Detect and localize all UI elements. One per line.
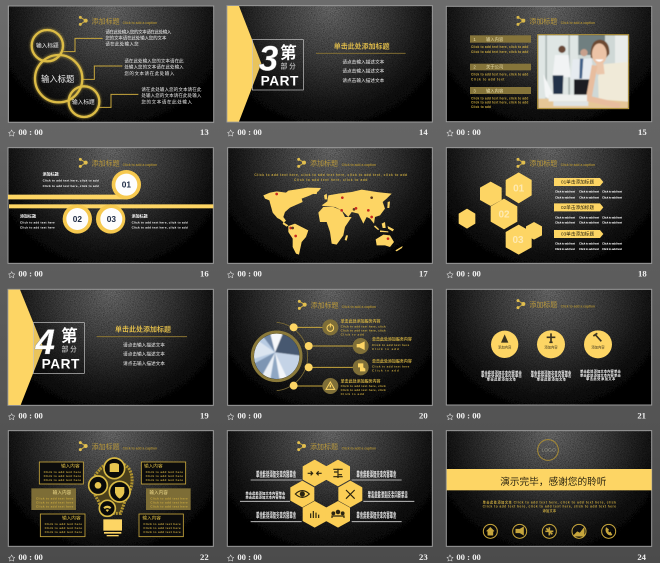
circle: plane: 添加内容 — [544, 345, 558, 350]
footer — [228, 127, 428, 137]
callout: bottom left: 输入内容 — [62, 515, 81, 522]
text block 02: Click to add text here — [20, 226, 55, 230]
heading: 添加标题 — [92, 442, 120, 451]
slide 22: light bulb — [8, 431, 213, 562]
callout: middle left: Click to add text here — [36, 496, 74, 500]
hexagon numbers: 01 — [513, 183, 525, 194]
side captions: 单击此处添加文本内容单击 — [256, 514, 297, 519]
caption 1: 单击此处添加文本内容单击 — [481, 369, 522, 374]
description lines: 请点击输入描述文本 — [123, 351, 165, 358]
icon: megaphone — [353, 338, 369, 354]
label 01: 01单击添加标题 — [561, 179, 594, 186]
service text 2 — [372, 336, 412, 351]
small text rows: Click to add text — [555, 221, 575, 225]
heading: Click to add a caption — [342, 163, 376, 167]
footer: 20 — [419, 411, 428, 421]
list item 1: Click to add text here, click to add — [471, 45, 528, 49]
text block 03 — [132, 212, 188, 230]
section title: 单击此处添加标题 — [115, 325, 171, 334]
heading: Click to add a caption — [123, 163, 157, 167]
service text 4: Click to add — [341, 392, 364, 396]
list item 3: Click to add — [471, 105, 491, 109]
list item 1: Click to add text here, click to add — [471, 50, 528, 54]
yellow wedge — [227, 6, 261, 122]
service text 1 — [341, 317, 386, 337]
footer — [9, 127, 209, 137]
side captions: 单击此处添加文本内容单击 — [256, 510, 297, 515]
callout: bottom left: Click to add text here — [45, 530, 82, 534]
heading — [516, 158, 595, 168]
list item 2: 关于公司 — [486, 64, 503, 71]
caption 2: 单击此处添加文本内容单击 — [531, 369, 572, 374]
footer: 00 : 00 — [456, 552, 481, 562]
small text rows — [555, 190, 622, 251]
footer: 00 : 00 — [237, 269, 262, 279]
callout: top left: Click to add text here — [44, 470, 81, 474]
service text 3: Click to add text here — [372, 365, 410, 369]
slide 24: closing — [446, 431, 652, 562]
map caption: Click to add text here, click to add text here, click to add text, click to add — [254, 173, 407, 177]
yellow bars — [8, 195, 213, 208]
footer: 21 — [637, 411, 646, 421]
text block 03: Click to add text here, click to add — [132, 220, 188, 224]
small text rows: Click to add text — [555, 215, 575, 219]
footer: 00 : 00 — [237, 127, 262, 137]
text block 02: Click to add text here — [20, 220, 55, 224]
hexagon cluster — [459, 172, 542, 255]
side captions: 单击此处添加文本内容单击 — [245, 494, 286, 499]
light bulb — [89, 458, 132, 536]
label 02 — [554, 203, 603, 211]
icon: power — [322, 319, 338, 335]
service text 3: Click to add — [372, 369, 399, 373]
heading — [297, 158, 376, 168]
heading: 添加标题 — [92, 17, 120, 26]
icon: warning — [322, 378, 338, 394]
footer: 00 : 00 — [18, 411, 43, 421]
footer: 00 : 00 — [237, 411, 262, 421]
part badge: 部 分 — [281, 61, 296, 70]
marker 01 — [112, 170, 141, 199]
circle labels: 输入标题 — [36, 42, 59, 50]
caption 2 — [531, 369, 572, 382]
small text rows: Click to add text — [579, 195, 599, 199]
small text rows: Click to add text — [579, 221, 599, 225]
footer — [228, 411, 428, 421]
callout: middle right: 输入内容 — [149, 489, 168, 496]
caption 2: 单击此处添加文本 — [537, 377, 567, 382]
label 02: 02单击添加标题 — [561, 204, 594, 211]
closing banner — [447, 469, 652, 490]
text blocks: 您的文本请在此处输入 — [124, 70, 175, 77]
text blocks: 请在此处输入您 — [105, 41, 139, 48]
callout: bottom right: Click to add text here — [143, 522, 181, 526]
callout: top right: Click to add text here — [146, 470, 183, 474]
hexagon numbers: 03 — [512, 235, 524, 246]
footer — [447, 411, 646, 421]
callout: bottom right: Click to add text here — [143, 530, 181, 534]
photo of skyscrapers — [253, 332, 300, 381]
circle labels: 输入标题 — [41, 74, 75, 84]
description lines: 请点击输入描述文本 — [342, 68, 385, 75]
service text 1: Click to add — [341, 333, 364, 337]
footer — [447, 127, 647, 137]
marker 01: 01 — [122, 180, 131, 190]
callout: top left: Click to add text here — [44, 478, 81, 482]
callout: top left: Click to add text here — [44, 474, 81, 478]
text block 01: Click to add text here, click to add — [43, 179, 99, 183]
caption 3: 单击此处添加文本内容单击 — [580, 372, 621, 377]
part badge: PART — [261, 73, 299, 88]
list item 2: 2 — [473, 65, 476, 70]
logo badge: LOGO — [541, 448, 556, 454]
side captions: 单击此处添加文本内容单击 — [256, 469, 297, 474]
hexagon icons — [295, 469, 355, 518]
part badge: 第 — [61, 326, 78, 346]
footer: 24 — [637, 552, 647, 562]
icon: hand — [353, 359, 369, 375]
slide 21: three circle icons — [446, 289, 652, 421]
callout: bottom right: Click to add text here — [143, 526, 181, 530]
service text 2: 单击此处添加服务内容 — [372, 336, 412, 342]
footer: 00 : 00 — [18, 269, 43, 279]
part badge — [252, 40, 303, 90]
small text rows: Click to add text — [602, 195, 622, 199]
closing description: 单击此处添加文本 Click to add text here, click to add text here, click — [483, 499, 616, 504]
small text rows: Click to add text — [602, 242, 622, 246]
part badge: 3 — [259, 40, 279, 79]
footer: 15 — [638, 127, 647, 137]
callout: bottom right: 输入内容 — [142, 515, 161, 522]
text blocks: 请在此处输入您的文本请在此处输入 — [105, 29, 172, 36]
part badge: PART — [42, 357, 80, 372]
yellow wedge — [8, 290, 43, 405]
small text rows: Click to add text — [555, 190, 575, 194]
list item 1: 输入内容 — [486, 36, 504, 43]
text block 01: 添加标题 — [43, 171, 59, 177]
small text rows: Click to add text — [579, 215, 599, 219]
side captions: 单击此处添加文本内容单击 — [368, 494, 408, 499]
callout: top right — [141, 462, 186, 484]
slide 18: hexagon list — [446, 148, 652, 279]
heading: Click to add a caption — [123, 446, 157, 450]
list item 2: Click to add text — [471, 77, 505, 81]
text blocks: 处输入您的文本请在此处输入 — [141, 92, 202, 99]
service text 3: 单击此处添加服务内容 — [372, 357, 412, 363]
callout: middle left: 输入内容 — [53, 489, 72, 496]
heading — [516, 16, 595, 26]
divider — [316, 52, 406, 55]
list item 3: 3 — [473, 88, 476, 93]
part badge: 部 分 — [62, 345, 77, 354]
connector lines — [294, 327, 353, 386]
footer — [228, 552, 428, 562]
service text 2: Click to add text here — [372, 343, 410, 347]
circle: tent: 添加内容 — [498, 345, 512, 350]
closing description: Click to add text here, click to add text here, click to add text here — [483, 505, 616, 509]
list item 2 — [470, 64, 531, 81]
slide 23: hexagon ring — [227, 431, 432, 562]
callout: top right: 输入内容 — [144, 463, 163, 470]
service text 4: Click to add text here, click — [341, 388, 386, 392]
list item 1 — [470, 35, 531, 54]
service text 1: 单击此处添加服务内容 — [341, 317, 381, 323]
text blocks: 请在此处输入您的文本请在此 — [124, 58, 184, 65]
text blocks: 请在此处输入您的文本请在此 — [141, 86, 202, 93]
heading: 添加标题 — [310, 442, 338, 451]
side captions — [245, 469, 408, 519]
list item 3: 输入内容 — [486, 87, 504, 94]
callout: bottom left — [40, 514, 85, 537]
service text 4: Click to add text here, click — [341, 384, 386, 388]
label 03 — [554, 230, 603, 238]
footer — [447, 552, 647, 562]
slide 15: list with photo — [446, 6, 652, 137]
heading — [79, 16, 157, 26]
circle: tools: 添加内容 — [591, 345, 605, 350]
caption 1: 单击此处添加文本 — [487, 377, 517, 382]
footer: 18 — [638, 269, 647, 279]
circle: tools — [584, 330, 612, 358]
list item 3: Click to add text here, click to add — [471, 96, 528, 100]
text block 02: 添加标题 — [20, 212, 36, 218]
marker 02: 02 — [73, 214, 82, 224]
arc — [277, 322, 308, 391]
footer: 14 — [419, 127, 428, 137]
callout: bottom right — [139, 514, 183, 537]
description lines — [123, 342, 165, 367]
callout: top right: Click to add text here — [146, 474, 183, 478]
part badge — [33, 323, 84, 373]
section title: 单击此处添加标题 — [334, 42, 390, 51]
slide 19: part 4 divider — [8, 289, 213, 421]
small text rows: Click to add text — [602, 221, 622, 225]
footer: 00 : 00 — [237, 552, 262, 562]
divider — [97, 335, 187, 338]
small text rows: Click to add text — [579, 242, 599, 246]
list item 3 — [470, 87, 531, 109]
side captions: 单击此处添加文本内容单击 — [356, 469, 397, 474]
photo ring — [252, 332, 301, 381]
callout: middle left — [31, 488, 76, 510]
footer — [9, 411, 209, 421]
footer: 00 : 00 — [456, 127, 481, 137]
heading: Click to add a caption — [561, 163, 595, 167]
small text rows: Click to add text — [602, 247, 622, 251]
callout: top right: Click to add text here — [146, 478, 183, 482]
service text 3 — [372, 357, 412, 373]
side captions: 单击此处添加文本内容单击 — [256, 473, 297, 478]
caption 2: 单击此处添加文本内容单击 — [531, 373, 572, 378]
footer — [228, 269, 428, 279]
list item 3: Click to add text here, click to add — [471, 101, 528, 105]
closing description: 添加文本 — [543, 508, 557, 513]
text block 01: Click to add text here, click to add — [43, 184, 99, 188]
text blocks — [105, 29, 202, 105]
callout: top left — [39, 462, 83, 484]
world map — [263, 188, 403, 255]
icon row — [483, 524, 616, 538]
footer — [9, 552, 209, 562]
footer: 13 — [200, 127, 209, 137]
label 03: 03单击添加标题 — [561, 231, 594, 238]
slide 13: linked circles — [8, 6, 214, 137]
small text rows: Click to add text — [602, 190, 622, 194]
footer: 16 — [200, 269, 209, 279]
slide 20: radial list with photo — [228, 289, 432, 421]
side captions: 单击此处添加文本内容单击 — [356, 514, 397, 519]
heading: Click to add a caption — [561, 304, 595, 308]
side captions: 单击此处添加文本内容单击 — [356, 473, 397, 478]
callout: middle left: Click to add text here — [36, 504, 74, 508]
footer: 00 : 00 — [456, 269, 481, 279]
part badge: 第 — [280, 43, 297, 63]
heading: Click to add a caption — [342, 446, 376, 450]
heading: Click to add a caption — [342, 305, 376, 309]
callout: bottom left: Click to add text here — [45, 526, 82, 530]
circle labels: 输入标题 — [72, 98, 95, 106]
marker 03: 03 — [107, 214, 116, 224]
hexagon numbers — [498, 183, 525, 246]
leader lines — [240, 480, 414, 522]
heading: 添加标题 — [529, 300, 557, 309]
photo frame — [538, 35, 629, 109]
caption 3: 单击此处添加文本 — [586, 376, 616, 381]
callout: middle right: Click to add text here — [150, 500, 188, 504]
list item 2: Click to add text here, click to add — [471, 73, 528, 77]
heading — [79, 441, 157, 451]
description lines — [342, 58, 385, 84]
circle labels — [36, 42, 95, 106]
heading — [298, 300, 376, 310]
service text 2: Click to add — [372, 347, 399, 351]
slide 16: numbered timeline — [8, 148, 213, 279]
service text 4 — [341, 377, 386, 396]
map caption — [254, 173, 407, 182]
footer: 23 — [419, 552, 428, 562]
side captions: 单击此处添加文本内容单击 — [368, 490, 408, 495]
callout: middle right: Click to add text here — [150, 504, 188, 508]
circle rings — [32, 30, 99, 117]
closing description — [483, 499, 616, 513]
footer: 00 : 00 — [456, 411, 481, 421]
caption 3: 单击此处添加文本内容单击 — [580, 369, 621, 374]
map pins — [275, 193, 389, 240]
text blocks: 您的文本请在此处输入您的文本 — [105, 35, 167, 42]
heading — [297, 441, 376, 451]
heading: 添加标题 — [310, 159, 338, 168]
text blocks: 处输入您的文本请在此处输入 — [124, 64, 184, 71]
small text rows: Click to add text — [579, 247, 599, 251]
heading: 添加标题 — [311, 301, 339, 310]
small text rows: Click to add text — [555, 195, 575, 199]
label 01 — [554, 178, 603, 186]
caption 1 — [481, 369, 522, 382]
list item 1: 1 — [473, 37, 476, 42]
footer — [9, 269, 209, 279]
footer: 00 : 00 — [18, 552, 43, 562]
logo badge — [538, 440, 558, 460]
heading: 添加标题 — [529, 159, 557, 168]
heading — [79, 158, 157, 168]
photo: businesswoman at laptop — [538, 35, 628, 109]
footer: 00 : 00 — [18, 127, 43, 137]
callout: top left: 输入内容 — [61, 463, 80, 470]
service text 1: Click to add text here, click — [341, 325, 386, 329]
hexagon numbers: 02 — [498, 209, 510, 220]
text block 03: 添加标题 — [132, 212, 148, 218]
circle: tent — [491, 331, 518, 358]
part badge: 4 — [34, 323, 55, 362]
footer: 19 — [200, 411, 209, 421]
closing message: 演示完毕，感谢您的聆听 — [500, 476, 607, 488]
service text 4: 单击此处添加服务内容 — [341, 377, 381, 383]
small text rows: Click to add text — [602, 215, 622, 219]
connector dots — [290, 323, 313, 390]
slide 17: world map — [228, 148, 432, 279]
service text 1: Click to add text here, click — [341, 329, 386, 333]
circle: plane — [537, 330, 565, 358]
heading: Click to add a caption — [561, 21, 595, 25]
text blocks: 您的文本请在此处输入 — [141, 98, 192, 105]
footer: 17 — [419, 269, 428, 279]
text block 03: Click to add text here, click to add — [132, 226, 188, 230]
side captions: 单击此处添加文本内容单击 — [356, 510, 397, 515]
heading: Click to add a caption — [123, 21, 157, 25]
callout: middle right: Click to add text here — [150, 496, 188, 500]
map caption: Click to add text here, click to add — [294, 178, 367, 182]
heading — [516, 299, 595, 309]
marker 03 — [96, 204, 125, 234]
text block 02 — [20, 212, 55, 230]
text block 01 — [43, 171, 99, 188]
description lines: 请点击输入描述文本 — [342, 77, 385, 84]
side captions: 单击此处添加文本内容单击 — [245, 491, 286, 496]
description lines: 请点击输入描述文本 — [342, 58, 385, 65]
heading: 添加标题 — [529, 17, 557, 26]
marker 02 — [63, 204, 92, 234]
slide 14: part 3 divider — [227, 6, 432, 137]
heading: 添加标题 — [92, 159, 120, 168]
small text rows: Click to add text — [555, 247, 575, 251]
connector lines — [63, 38, 138, 107]
description lines: 请点击输入描述文本 — [123, 360, 165, 367]
hexagon ring — [290, 460, 362, 528]
small text rows: Click to add text — [555, 242, 575, 246]
small text rows: Click to add text — [579, 190, 599, 194]
callout: middle right — [146, 488, 191, 510]
footer — [447, 269, 647, 279]
footer: 22 — [200, 552, 209, 562]
caption 3 — [580, 369, 621, 381]
callout: bottom left: Click to add text here — [45, 522, 82, 526]
callout: middle left: Click to add text here — [36, 500, 74, 504]
caption 1: 单击此处添加文本内容单击 — [481, 373, 522, 378]
description lines: 请点击输入描述文本 — [123, 342, 165, 349]
